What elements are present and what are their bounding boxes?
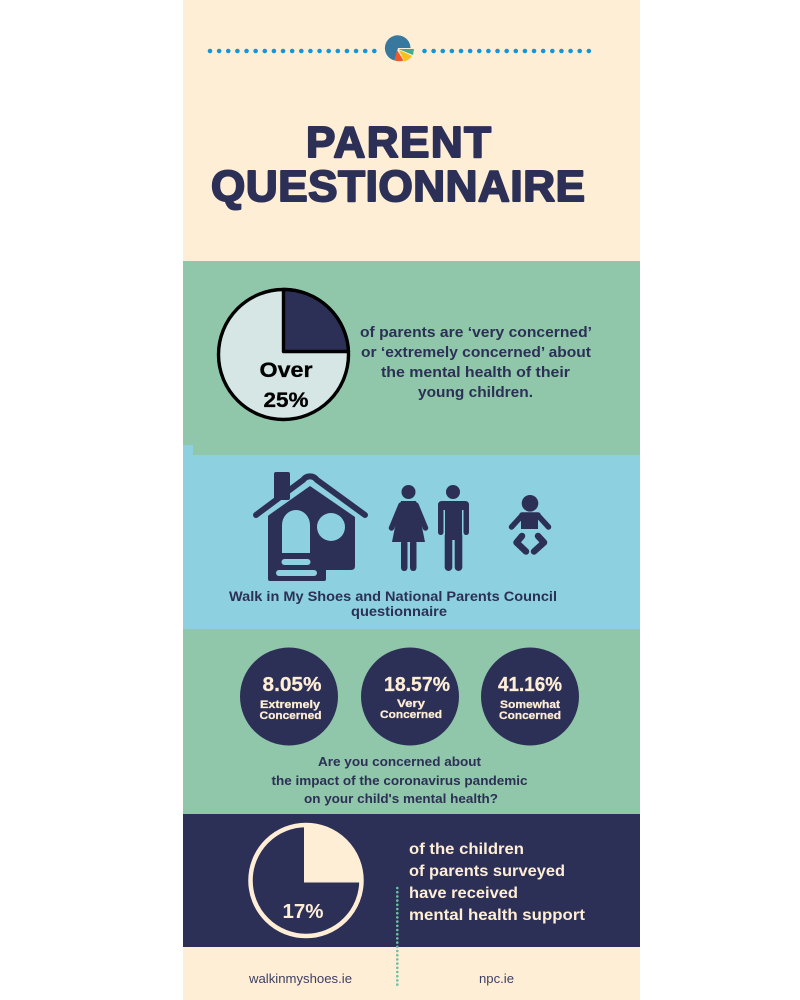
text: survey source: questionnaire	[351, 604, 448, 619]
panel: concern levels	[183, 629, 640, 814]
stat: extremely concerned: Concerned	[260, 710, 322, 722]
text: survey question: Are you concerned about	[318, 754, 482, 769]
text: children received support: have received	[409, 885, 518, 902]
pie chart: 17%: 17%	[282, 900, 324, 923]
text: footer links	[248, 971, 514, 986]
text: footer links: npc.ie	[479, 971, 514, 986]
text: children received support: of the children	[409, 841, 524, 858]
text: children received support: mental health support	[409, 907, 585, 924]
icon: baby	[512, 495, 548, 552]
pie chart: 17%	[250, 825, 362, 936]
stat: very concerned: Concerned	[380, 709, 442, 721]
text: survey question	[272, 754, 528, 806]
text: parents concerned: of parents are ‘very concerned’	[360, 325, 592, 341]
text: footer links: walkinmyshoes.ie	[248, 971, 352, 986]
pie chart: over 25%: Over	[260, 359, 312, 382]
stat: extremely concerned	[240, 648, 338, 746]
stat: somewhat concerned: Somewhat	[500, 699, 560, 711]
text: children received support	[409, 841, 585, 924]
pie chart: over 25%	[218, 289, 348, 420]
stat: very concerned: 18.57%	[384, 674, 450, 696]
title: QUESTIONNAIRE	[211, 162, 585, 211]
text: survey source: Walk in My Shoes and National Parents Council	[229, 589, 557, 604]
icon: man	[438, 485, 469, 571]
text: parents concerned: the mental health of their	[381, 365, 570, 381]
title	[211, 118, 585, 211]
stat: extremely concerned: 8.05%	[262, 674, 322, 696]
text: survey question: on your child's mental health?	[304, 791, 498, 806]
icon: house	[256, 472, 365, 581]
panel: family	[183, 445, 640, 629]
icon: woman	[392, 485, 426, 571]
stat: very concerned	[361, 648, 459, 746]
stat: extremely concerned: Extremely	[260, 699, 321, 711]
icon: dotted line with pie	[210, 35, 590, 62]
text: parents concerned: young children.	[418, 385, 533, 401]
stat: somewhat concerned	[481, 648, 579, 746]
title: PARENT	[306, 118, 491, 167]
stat: somewhat concerned: 41.16%	[498, 674, 562, 696]
stat: somewhat concerned: Concerned	[499, 710, 561, 722]
text: survey source	[229, 589, 557, 619]
text: survey question: the impact of the coronavirus pandemic	[272, 773, 528, 788]
text: parents concerned	[360, 325, 592, 401]
panel: over 25 percent	[183, 261, 640, 455]
pie chart: over 25%: 25%	[264, 389, 309, 412]
text: children received support: of parents surveyed	[409, 863, 565, 880]
text: parents concerned: or ‘extremely concerned’ about	[361, 345, 591, 361]
stat: very concerned: Very	[397, 698, 426, 710]
panel: mental health support	[183, 814, 640, 947]
